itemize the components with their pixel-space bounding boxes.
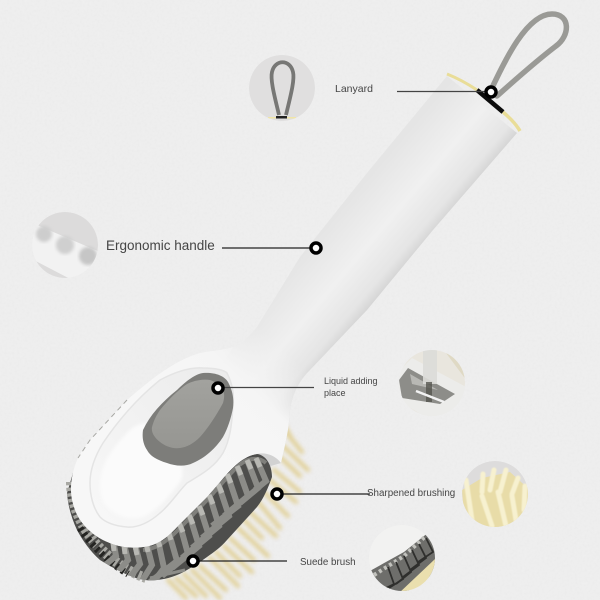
callout: ergonomic handle [30, 212, 321, 282]
head basin [90, 368, 233, 527]
label: ergonomic handle: Ergonomic handle [106, 238, 215, 253]
callout: lanyard [249, 55, 496, 121]
thumbnail: sharpened brushing [462, 461, 530, 530]
head dashed edge [78, 400, 127, 458]
upper band lip [143, 459, 266, 550]
rubber suede band [67, 454, 272, 584]
liquid button [143, 373, 233, 466]
label: lanyard: Lanyard [335, 83, 373, 95]
thumbnail: suede brush [371, 534, 435, 591]
yellow bristles [168, 425, 308, 598]
label: suede brush: Suede brush [300, 557, 356, 568]
callout: liquid adding place [211, 350, 465, 413]
callout: suede brush [186, 534, 435, 591]
thumbnail: liquid adding [399, 350, 465, 413]
handle [200, 76, 517, 470]
label: liquid adding place: place [324, 388, 346, 398]
comb teeth [71, 482, 146, 578]
lanyard loop [491, 14, 566, 96]
chevron ribs [104, 460, 266, 584]
basin inner well [100, 424, 183, 518]
head body [71, 327, 310, 548]
label: sharpened brushing: Sharpened brushing [367, 488, 455, 499]
label: liquid adding place: Liquid adding [324, 376, 378, 386]
rib highlights [113, 458, 260, 555]
thumbnail: ergonomic handle [36, 212, 98, 278]
thumbnail: lanyard [249, 55, 315, 121]
callout: sharpened brushing [272, 461, 530, 530]
gold cap rim [447, 74, 520, 131]
